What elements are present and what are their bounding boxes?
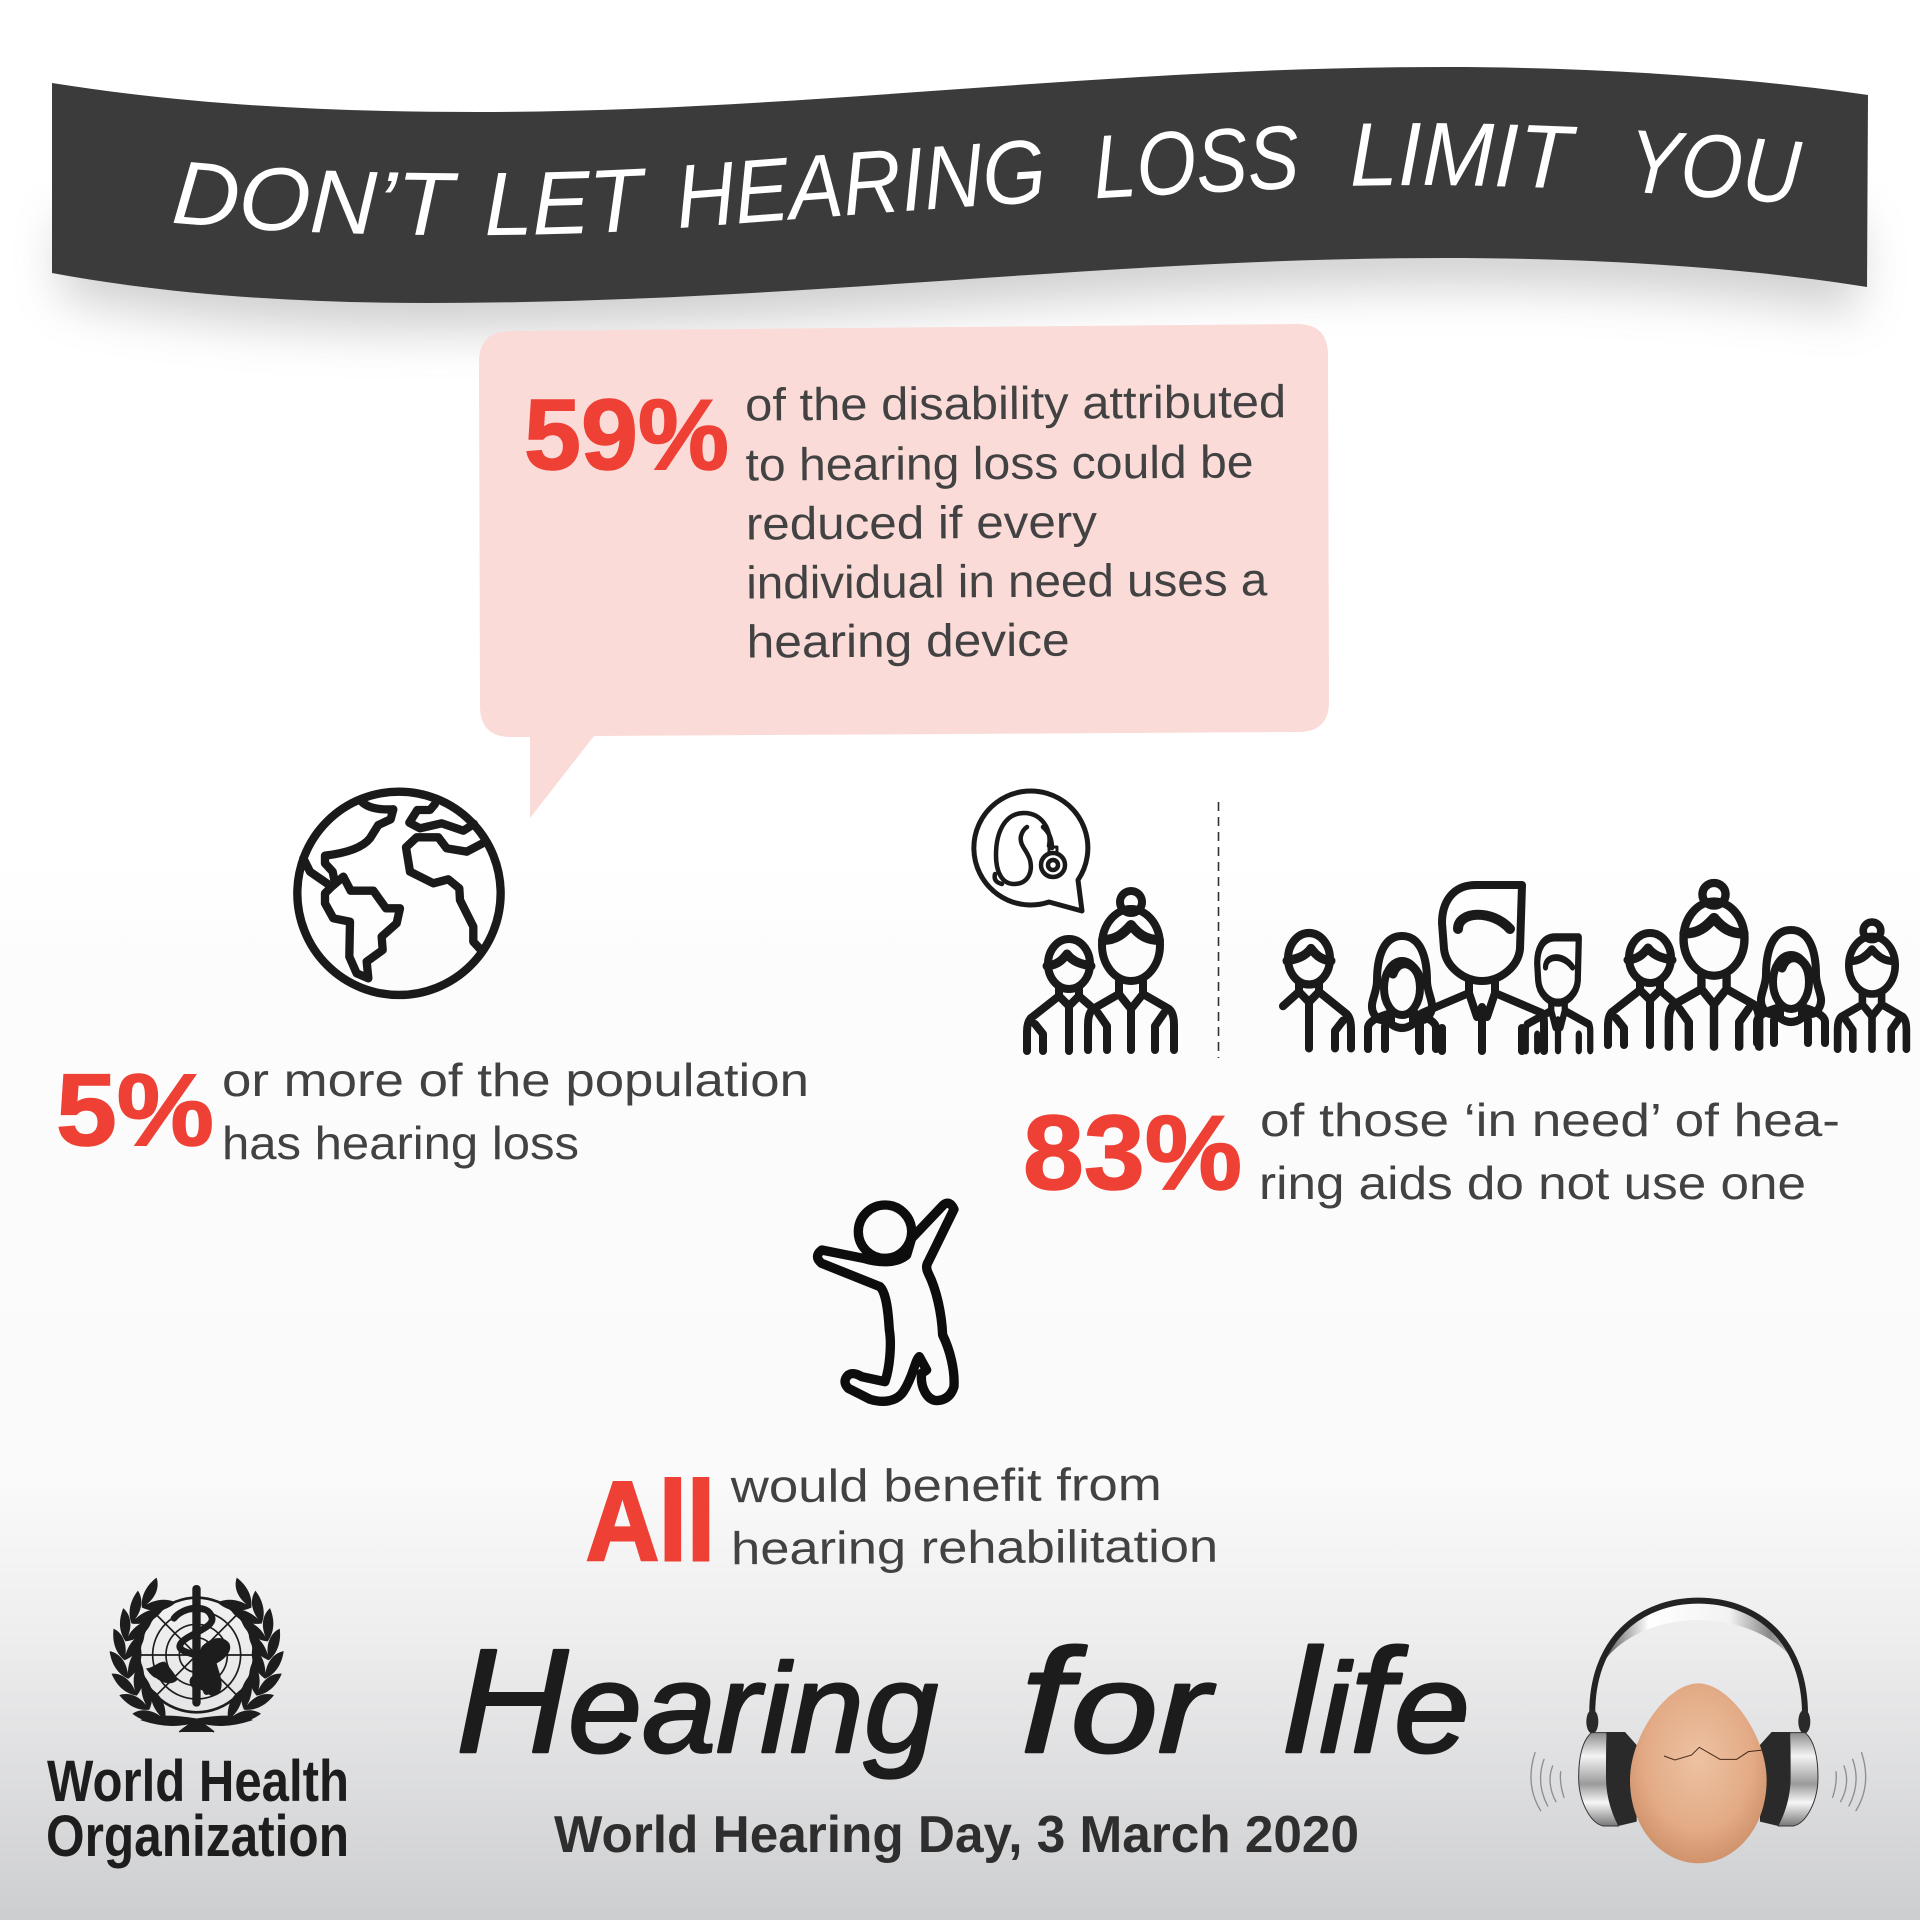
divider dashed line (1218, 802, 1220, 1058)
bubble text: reduced if every (746, 495, 1097, 550)
icon: group of people not using hearing aids (1283, 883, 1906, 1051)
right ear cup (1778, 1733, 1818, 1826)
text (729, 1458, 1218, 1574)
WHO wordmark: World Health (47, 1749, 349, 1814)
WHO logo (46, 1578, 349, 1869)
banner title: LIMIT (1352, 123, 1578, 188)
person 7 (1757, 930, 1825, 1043)
number 5%: 5% (56, 1053, 214, 1167)
banner title: LOSS (1098, 126, 1297, 198)
bubble text: to hearing loss could be (745, 435, 1254, 491)
person 8 (1838, 922, 1906, 1049)
title banner (52, 67, 1868, 303)
text: would benefit from (729, 1458, 1162, 1512)
banner title: HEARING (680, 140, 1042, 228)
WHO logo: Organization (46, 1804, 349, 1869)
word All: All (586, 1459, 715, 1584)
panel: speech bubble 59% (479, 324, 1329, 818)
man (1027, 939, 1095, 1051)
bubble text: hearing device (746, 614, 1070, 668)
person 5 (1608, 933, 1676, 1045)
icon: dancing person (817, 1203, 954, 1401)
slogan: Hearing for life (456, 1619, 1470, 1784)
slogan: Hearing for life: life (1284, 1619, 1470, 1784)
banner title: YOU (1638, 130, 1803, 202)
text: hearing rehabilitation (731, 1520, 1218, 1574)
icon: hearing aid speech bubble (974, 791, 1088, 911)
person 4 (1526, 937, 1590, 1050)
bubble shape (479, 324, 1329, 818)
banner ribbon (52, 67, 1868, 303)
stat: All benefit (586, 1458, 1218, 1584)
text: or more of the population (222, 1054, 809, 1106)
banner title (174, 123, 1803, 236)
icon: egg with headphones (1531, 1601, 1866, 1863)
egg (1630, 1683, 1767, 1863)
stat 59%: 59% (524, 379, 729, 491)
left ear cup (1579, 1733, 1618, 1826)
slogan: Hearing for life: for (1020, 1619, 1216, 1784)
stat: 83% do not use: ring aids do not use one (1259, 1157, 1806, 1209)
person 3 (1420, 885, 1544, 1051)
egg crack (1664, 1747, 1763, 1760)
bubble text: individual in need uses a (746, 553, 1268, 609)
person 6 (1669, 883, 1759, 1047)
slogan: Hearing for life: Hearing (456, 1619, 938, 1784)
number 83%: 83% (1023, 1094, 1242, 1212)
stat: 83% do not use (1023, 1094, 1840, 1212)
sound waves (1531, 1753, 1866, 1811)
banner title: LET (487, 168, 646, 236)
banner shadow (62, 220, 1857, 330)
stat: 5% population (56, 1053, 809, 1169)
bubble text: of the disability attributed (745, 375, 1286, 431)
headband (1599, 1603, 1800, 1670)
woman with bun (1088, 891, 1174, 1050)
bubble text (745, 375, 1288, 668)
banner title: DON’T (174, 162, 459, 235)
icon: two people with hearing aid (1027, 891, 1174, 1051)
event date: World Hearing Day, 3 March 2020 (554, 1806, 1359, 1864)
stat: 5% population: has hearing loss (222, 1117, 579, 1169)
text: of those ‘in need’ of hea- (1260, 1094, 1840, 1146)
person 1 (1283, 933, 1351, 1048)
icon: globe (297, 792, 501, 995)
person 2 (1368, 936, 1436, 1049)
WHO emblem (110, 1578, 284, 1732)
